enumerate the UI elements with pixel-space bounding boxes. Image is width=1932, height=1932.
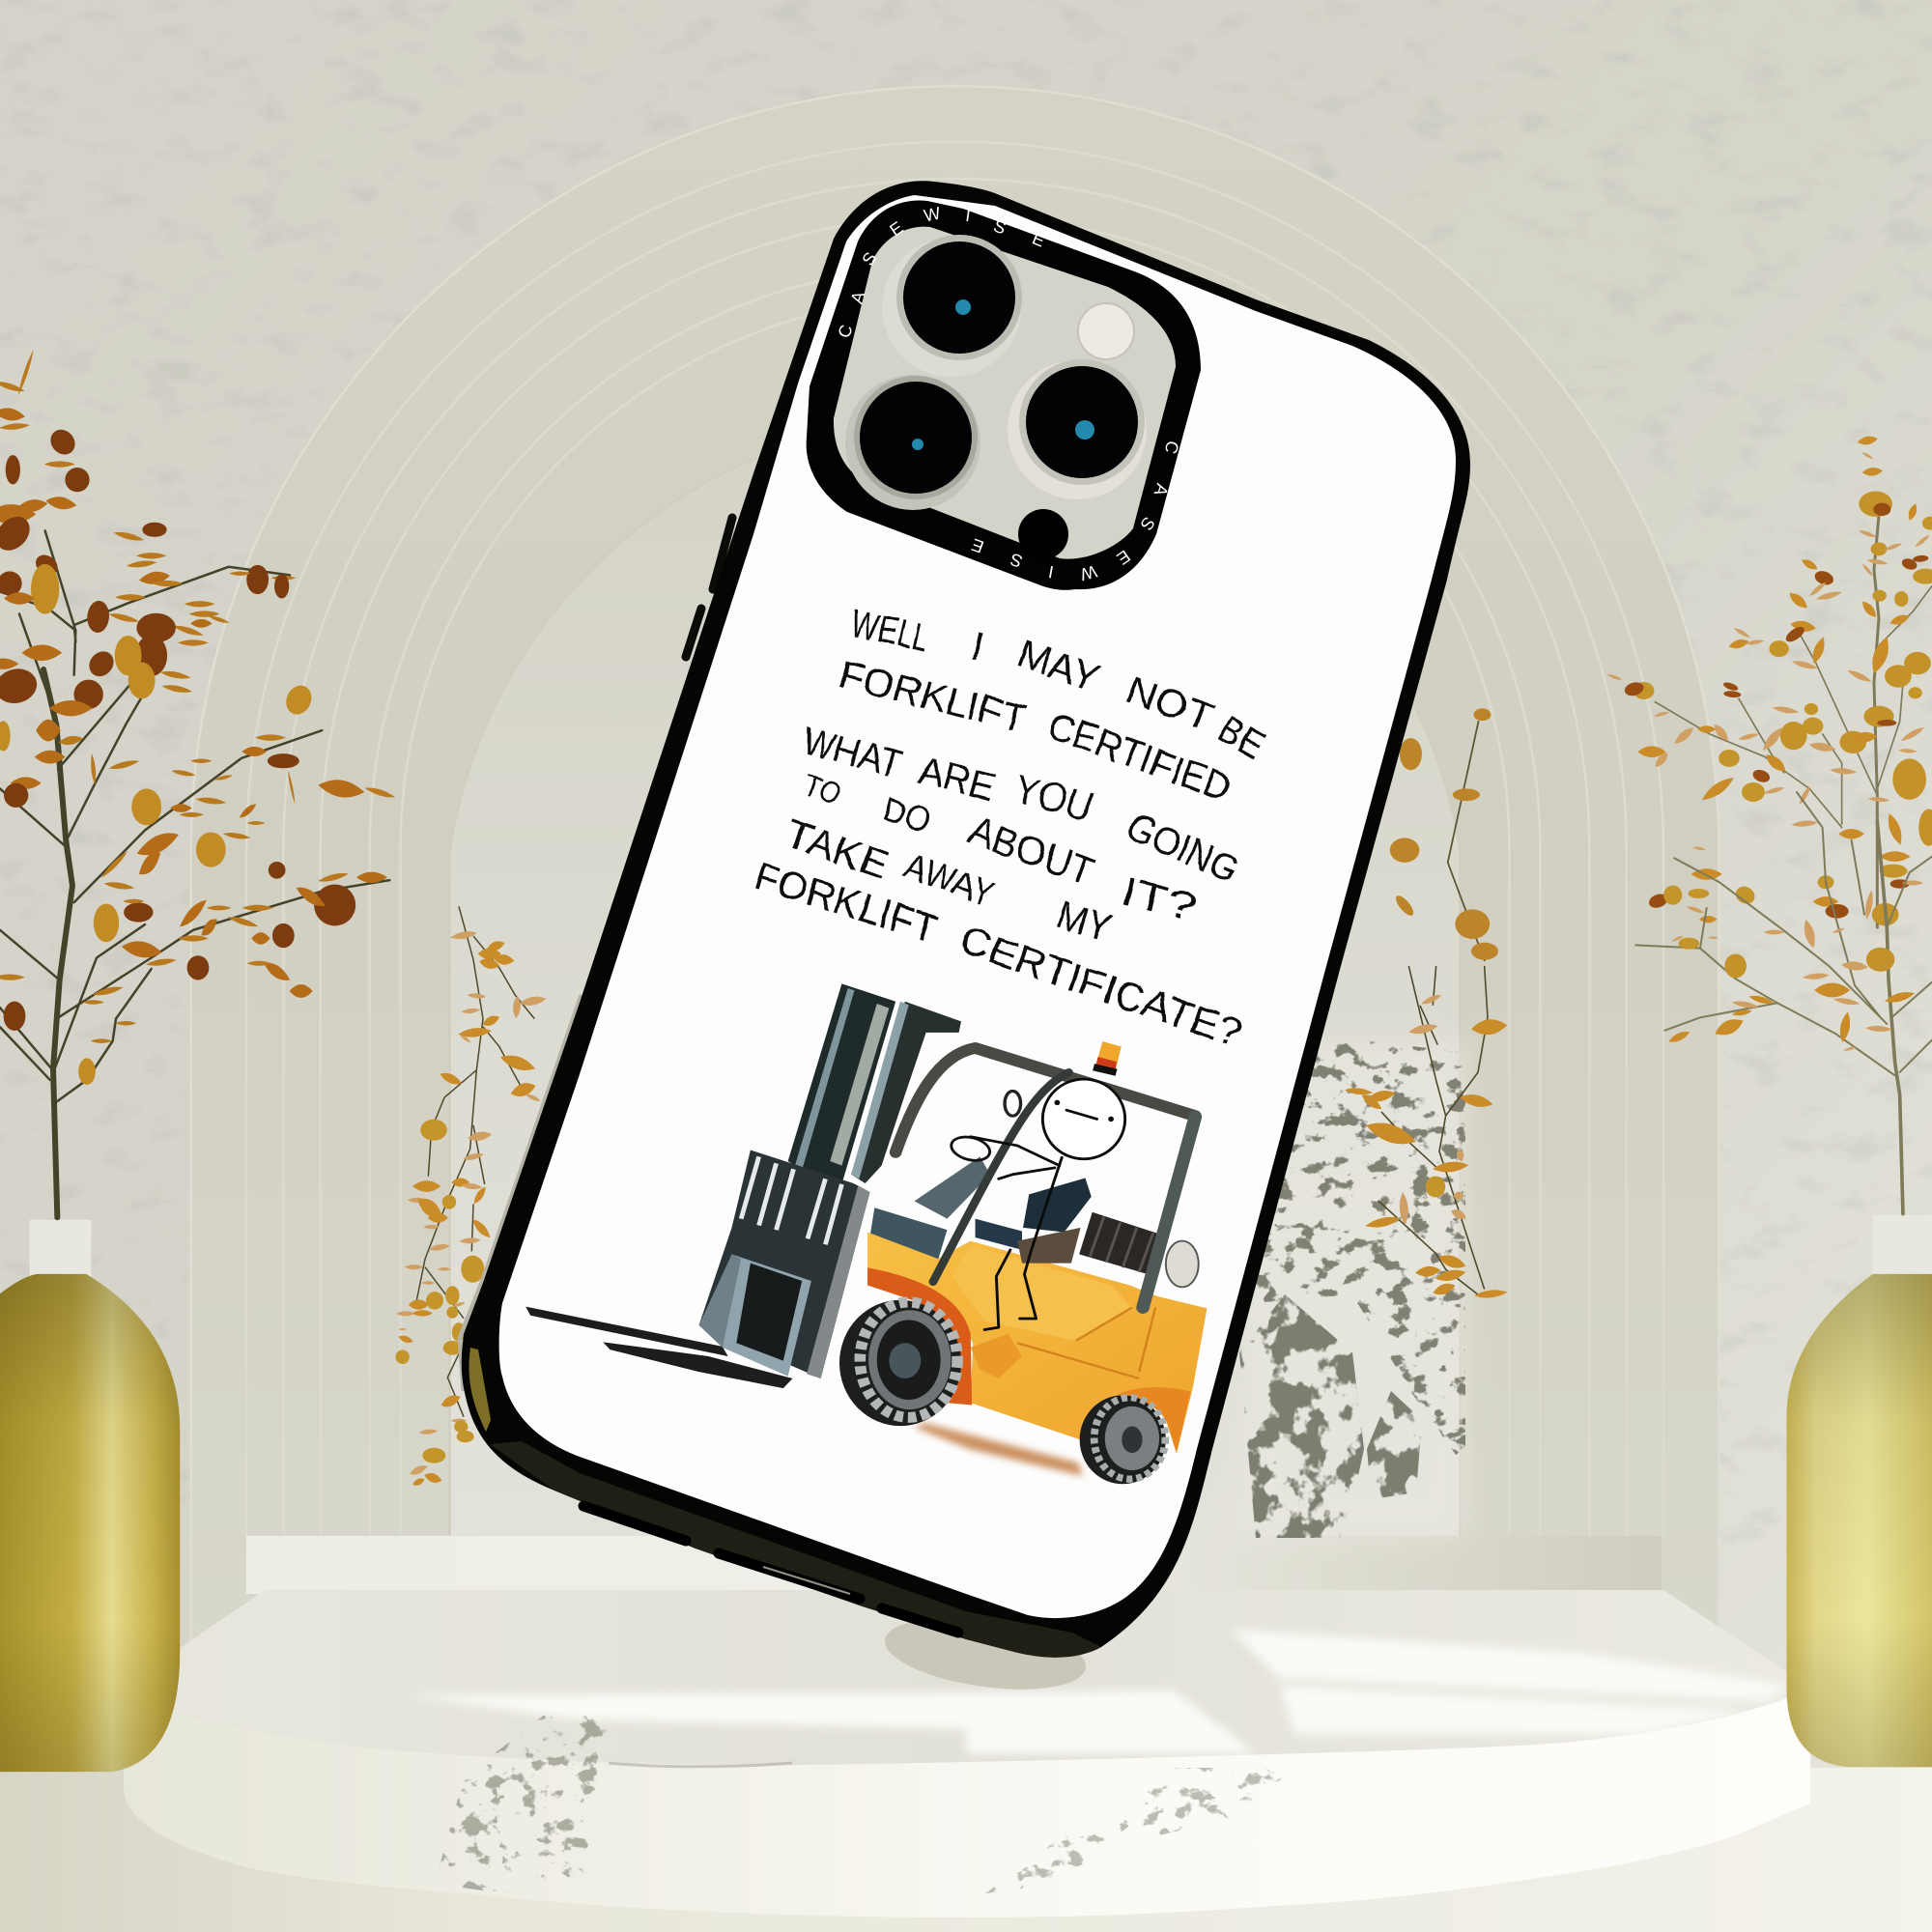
warning beacon bbox=[1093, 1041, 1122, 1076]
flash bbox=[1078, 303, 1134, 359]
handwritten quote: CERTIFICATE? bbox=[954, 918, 1247, 1055]
right lens bbox=[1008, 359, 1147, 499]
left gold vase bbox=[0, 1220, 180, 1772]
CASEWISE brand ring text: E bbox=[1030, 228, 1047, 251]
right gold vase bbox=[1786, 1215, 1932, 1767]
stick figure driver bbox=[971, 1079, 1125, 1329]
lidar sensor bbox=[1018, 509, 1068, 559]
left tree with golden leaves bbox=[0, 348, 395, 1217]
centre right vine lower bbox=[1345, 966, 1508, 1299]
handwritten quote: BE bbox=[1211, 706, 1272, 767]
CASEWISE brand ring text: S bbox=[1136, 513, 1159, 534]
left side buttons bbox=[686, 518, 732, 657]
handwritten quote: ARE bbox=[914, 747, 1000, 810]
handwritten quote: GOING bbox=[1121, 804, 1246, 893]
CASEWISE brand ring text bbox=[834, 203, 1183, 584]
CASEWISE brand ring text: A bbox=[1151, 481, 1172, 498]
forks bbox=[526, 1307, 793, 1388]
white screen back bbox=[499, 195, 1456, 1618]
console and steering column bbox=[869, 1133, 993, 1261]
right tree lower trunk and leaves bbox=[1635, 792, 1932, 1214]
handwritten quote: NOT bbox=[1121, 668, 1219, 739]
CASEWISE brand ring text: I bbox=[964, 206, 972, 225]
case outer shell bbox=[462, 181, 1470, 1658]
handwritten quote bbox=[750, 601, 1272, 1055]
ground shadow bbox=[915, 1423, 1083, 1476]
LPG tank bbox=[1079, 1212, 1199, 1287]
handwritten quote: FORKLIFT bbox=[835, 652, 1031, 741]
CASEWISE brand ring text: E bbox=[886, 217, 907, 241]
marble stain on niche wall bbox=[1239, 1034, 1465, 1538]
top lens bbox=[882, 235, 1022, 377]
CASEWISE brand ring text: E bbox=[1113, 546, 1134, 569]
front guard pillar bbox=[933, 1072, 1068, 1282]
centre right vine upper bbox=[1390, 708, 1498, 961]
marble podium bbox=[124, 1590, 1810, 1918]
handwritten quote: I bbox=[967, 623, 987, 669]
CASEWISE brand ring text: C bbox=[834, 323, 857, 340]
phone cast shadow bbox=[880, 1607, 1091, 1700]
handwritten quote: IT? bbox=[1117, 868, 1201, 930]
handwritten quote: AWAY bbox=[899, 845, 999, 914]
CASEWISE brand ring text: W bbox=[923, 203, 942, 226]
charging port and speaker slits bbox=[583, 1506, 958, 1633]
handwritten quote: CERTIFIED bbox=[1042, 702, 1237, 810]
yellow body bbox=[867, 1232, 1207, 1454]
centre left vine bbox=[395, 906, 547, 1488]
CASEWISE brand ring text: A bbox=[847, 289, 868, 306]
right tree upper branches and leaves bbox=[1606, 435, 1932, 927]
handwritten quote: FORKLIFT bbox=[750, 853, 943, 951]
seat bbox=[976, 1178, 1092, 1264]
camera plate bbox=[834, 227, 1176, 559]
podium front face bbox=[124, 1688, 1810, 1918]
handwritten quote: WELL bbox=[847, 601, 934, 661]
stepped arch niche bbox=[191, 86, 1719, 1645]
podium top surface bbox=[124, 1590, 1810, 1765]
silver side edge bbox=[460, 995, 582, 1391]
ledge wall behind podium bbox=[246, 1536, 1662, 1594]
handwritten quote: WHAT bbox=[797, 718, 906, 787]
marble veins on podium bbox=[435, 1710, 1294, 1893]
fork carriage bbox=[699, 1151, 869, 1378]
gold reflection on case corner bbox=[469, 1348, 491, 1432]
handwritten quote: MAY bbox=[1011, 631, 1105, 700]
CASEWISE brand ring text: C bbox=[1160, 439, 1183, 456]
CASEWISE brand ring text: S bbox=[1008, 550, 1025, 571]
olive glossy lower edge bbox=[490, 1441, 1101, 1658]
side mirror bbox=[1005, 1091, 1021, 1116]
overhead guard bbox=[895, 1048, 1195, 1308]
forklift with stick figure driver bbox=[526, 983, 1207, 1484]
handwritten quote: YOU bbox=[1009, 766, 1097, 830]
mast bbox=[788, 983, 961, 1192]
CASEWISE brand ring text: S bbox=[991, 216, 1009, 238]
handwritten quote: TAKE bbox=[780, 810, 895, 888]
CASEWISE brand ring text: S bbox=[858, 248, 881, 270]
handwritten quote: TO bbox=[799, 768, 844, 811]
CASEWISE brand ring text: W bbox=[1078, 561, 1099, 584]
CASEWISE brand ring text: I bbox=[1047, 562, 1055, 582]
rear wheel bbox=[1080, 1395, 1166, 1484]
floor bbox=[0, 1768, 1932, 1932]
handwritten quote: ABOUT bbox=[962, 808, 1100, 895]
camera bump ring bbox=[807, 200, 1201, 590]
handwritten quote: DO bbox=[878, 788, 936, 841]
handwritten quote: MY bbox=[1052, 893, 1118, 951]
left lens bbox=[845, 375, 980, 510]
sunlit stripes on podium bbox=[406, 1630, 1787, 1753]
CASEWISE brand ring text: E bbox=[969, 535, 986, 556]
front wheel bbox=[839, 1300, 961, 1426]
phone with case bbox=[460, 181, 1470, 1658]
